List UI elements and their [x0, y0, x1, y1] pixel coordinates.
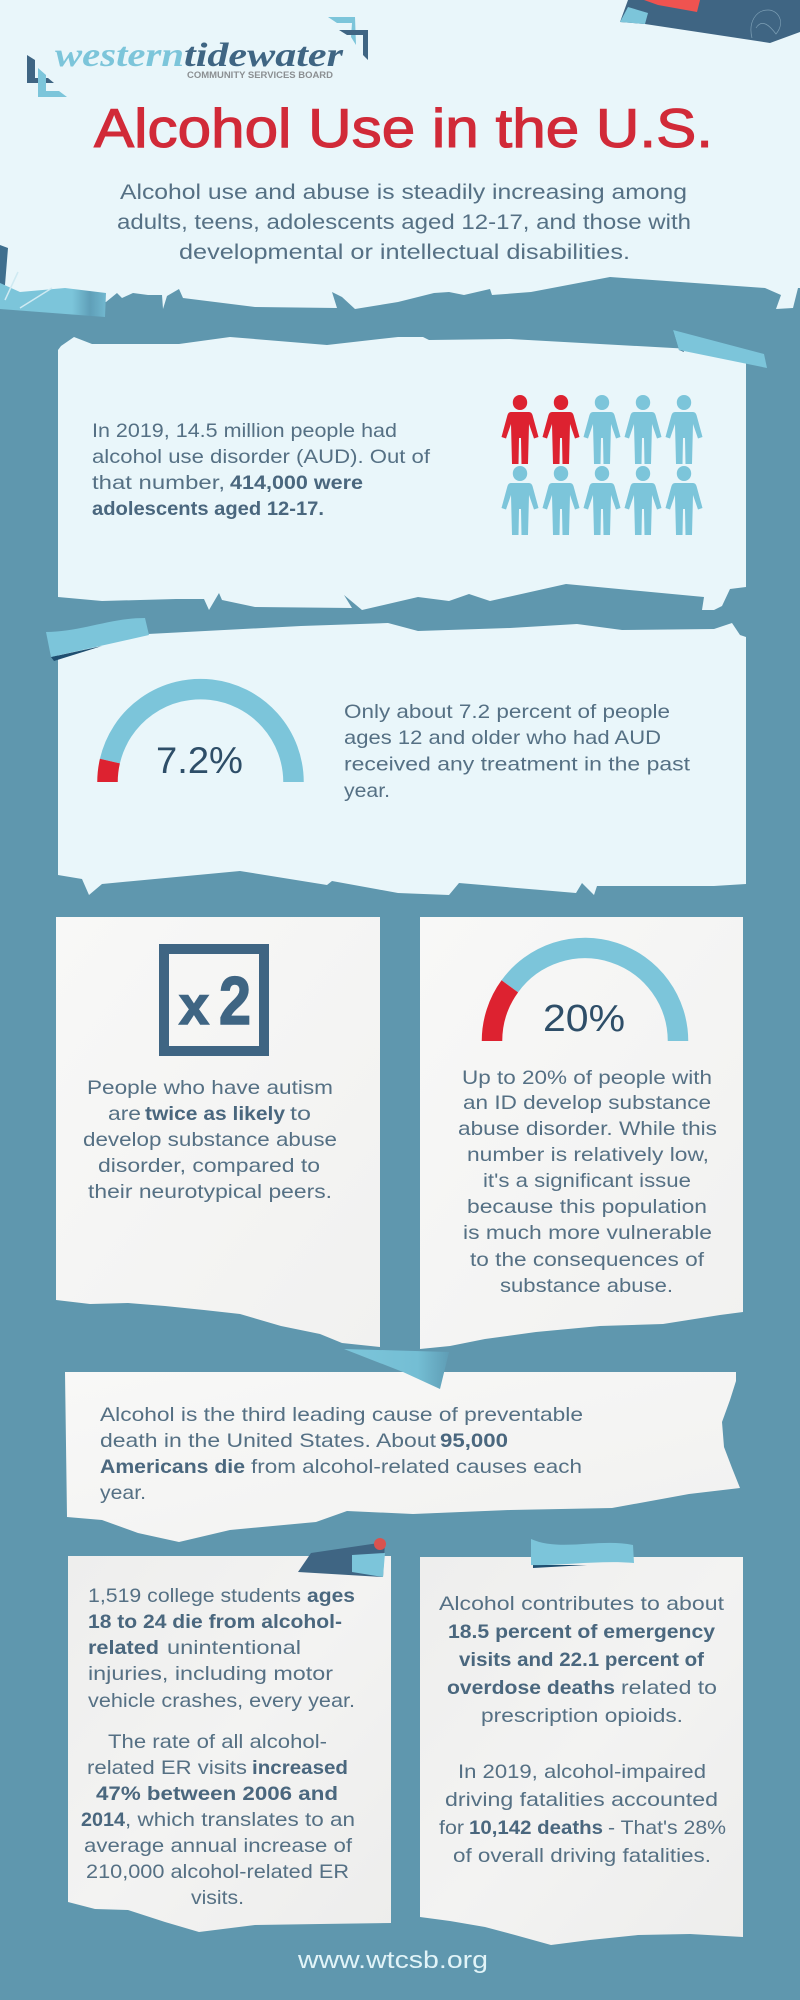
text: intellectual disability: abuse disorder. While this	[458, 1118, 717, 1140]
text: ER visits: increased	[252, 1757, 348, 1779]
text: intellectual disability: Up to 20% of people with	[462, 1067, 712, 1089]
text: driving fatalities: of overall driving fatalities.	[453, 1845, 711, 1867]
text: intellectual disability: it's a significant issue	[483, 1170, 691, 1192]
text: emergency visits: 18.5 percent of emergency	[448, 1621, 715, 1643]
text: autism: develop substance abuse	[83, 1129, 337, 1151]
tape: card seven	[531, 1539, 634, 1568]
text: college students: unintentional	[167, 1637, 301, 1659]
footer: website: www.wtcsb.org	[297, 1947, 488, 1974]
text: autism	[83, 1077, 337, 1203]
text: autism: are	[108, 1103, 141, 1125]
text: college students: ages	[307, 1585, 355, 1607]
text: leading cause of death: death in the United States. About	[100, 1430, 437, 1452]
text: intellectual disability: substance abuse.	[500, 1275, 673, 1297]
icon: times two box: 2	[219, 963, 251, 1039]
text: intellectual disability: because this population	[467, 1196, 707, 1218]
text: ER visits: visits.	[191, 1887, 244, 1909]
logo: western tidewater community services board: western	[55, 37, 184, 74]
tape: card one	[673, 330, 767, 368]
text: treatment statistic: ages 12 and older who had AUD	[344, 727, 661, 749]
text: leading cause of death: Americans die	[100, 1456, 245, 1478]
text: driving fatalities: 10,142 deaths	[469, 1817, 603, 1839]
panel: college students and ER visits	[68, 1538, 391, 1932]
text: ER visits: average annual increase of	[84, 1835, 353, 1857]
text: treatment statistic: year.	[344, 780, 390, 802]
text: ER visits	[81, 1731, 355, 1909]
panel: AUD statistic	[58, 330, 767, 610]
intro text	[117, 180, 691, 264]
panel: intellectual disability	[420, 917, 743, 1349]
text: autism: their neurotypical peers.	[88, 1181, 332, 1203]
text: emergency visits: overdose deaths	[447, 1677, 615, 1699]
gauge: 20 percent	[492, 948, 678, 1041]
text: driving fatalities	[439, 1761, 726, 1867]
intro text: Alcohol use and abuse is steadily increasing among	[120, 180, 687, 204]
text: autism: People who have autism	[87, 1077, 333, 1099]
text: emergency visits: prescription opioids.	[481, 1705, 683, 1727]
text: emergency visits: visits and 22.1 percent of	[459, 1649, 705, 1671]
text: AUD statistic: alcohol use disorder (AUD). Out of	[92, 446, 431, 468]
text: ER visits: related ER visits	[87, 1757, 247, 1779]
text: leading cause of death: from alcohol-related causes each	[251, 1456, 582, 1478]
text: college students: 18 to 24 die from alcohol-	[88, 1611, 342, 1633]
text: autism: disorder, compared to	[98, 1155, 320, 1177]
text: ER visits: 47% between 2006 and	[96, 1783, 338, 1805]
text: emergency visits: Alcohol contributes to about	[439, 1593, 725, 1615]
text: AUD statistic	[92, 420, 431, 520]
text: ER visits: 210,000 alcohol-related ER	[86, 1861, 349, 1883]
text: intellectual disability	[458, 1067, 717, 1297]
text: driving fatalities: for	[439, 1817, 465, 1839]
text: leading cause of death: 95,000	[440, 1430, 508, 1452]
text: driving fatalities: - That's 28%	[608, 1817, 726, 1839]
text: AUD statistic: In 2019, 14.5 million people had	[92, 420, 397, 442]
text: intellectual disability: to the consequences of	[470, 1249, 705, 1271]
text: ER visits: , which translates to an	[125, 1809, 355, 1831]
text: treatment statistic: received any treatment in the past	[344, 754, 691, 776]
icon: times two box: x	[179, 976, 209, 1036]
icon: ten people, two highlighted	[502, 395, 702, 535]
decoration: top right torn tape	[620, 0, 800, 43]
text: college students: vehicle crashes, every year.	[88, 1690, 355, 1712]
text: emergency visits	[439, 1593, 725, 1727]
intro text: developmental or intellectual disabilities.	[179, 240, 630, 264]
text: college students: injuries, including motor	[88, 1663, 334, 1685]
tape: card six	[298, 1538, 386, 1577]
logo: western tidewater community services board: tidewater	[184, 37, 344, 74]
title: Alcohol Use in the U.S.	[94, 97, 713, 159]
text: leading cause of death: Alcohol is the third leading cause of preventable	[100, 1404, 583, 1426]
tape: triangle between panels	[344, 1349, 449, 1389]
panel: leading cause of death	[65, 1372, 740, 1542]
text: AUD statistic: adolescents aged 12-17.	[92, 498, 324, 520]
text: intellectual disability: an ID develop substance	[463, 1092, 711, 1114]
logo: western tidewater community services board	[27, 17, 368, 97]
decoration: left torn tape	[0, 245, 106, 317]
panel: emergency visits and driving fatalities	[420, 1539, 743, 1945]
text: emergency visits: related to	[621, 1677, 717, 1699]
intro text: adults, teens, adolescents aged 12-17, and those with	[117, 210, 691, 234]
text: college students	[88, 1585, 355, 1712]
gauge: 7.2 percent: 7.2%	[156, 740, 243, 781]
panel: autism	[56, 917, 380, 1347]
text: driving fatalities: In 2019, alcohol-impaired	[458, 1761, 706, 1783]
panel: treatment statistic	[46, 618, 746, 895]
text: leading cause of death: year.	[100, 1482, 146, 1504]
text: autism: twice as likely	[145, 1103, 285, 1125]
text: treatment statistic: Only about 7.2 percent of people	[344, 701, 670, 723]
text: college students: 1,519 college students	[88, 1585, 301, 1607]
text: AUD statistic: that number,	[92, 472, 225, 494]
text: ER visits: The rate of all alcohol-	[108, 1731, 327, 1753]
icon: times two box	[164, 949, 264, 1051]
text: intellectual disability: is much more vulnerable	[463, 1222, 712, 1244]
panel: header torn paper	[0, 0, 800, 309]
text: autism: to	[290, 1103, 311, 1125]
text: intellectual disability: number is relatively low,	[467, 1144, 709, 1166]
text: leading cause of death	[100, 1404, 583, 1504]
text: ER visits: 2014	[81, 1809, 125, 1831]
text: treatment statistic	[344, 701, 691, 802]
text: college students: related	[88, 1637, 159, 1659]
tape: card two	[46, 618, 149, 661]
logo: western tidewater community services board: COMMUNITY SERVICES BOARD	[187, 70, 333, 81]
text: driving fatalities: driving fatalities accounted	[445, 1789, 718, 1811]
text: AUD statistic: 414,000 were	[230, 472, 363, 494]
gauge: 20 percent: 20%	[543, 998, 625, 1040]
gauge: 7.2 percent	[108, 689, 294, 782]
